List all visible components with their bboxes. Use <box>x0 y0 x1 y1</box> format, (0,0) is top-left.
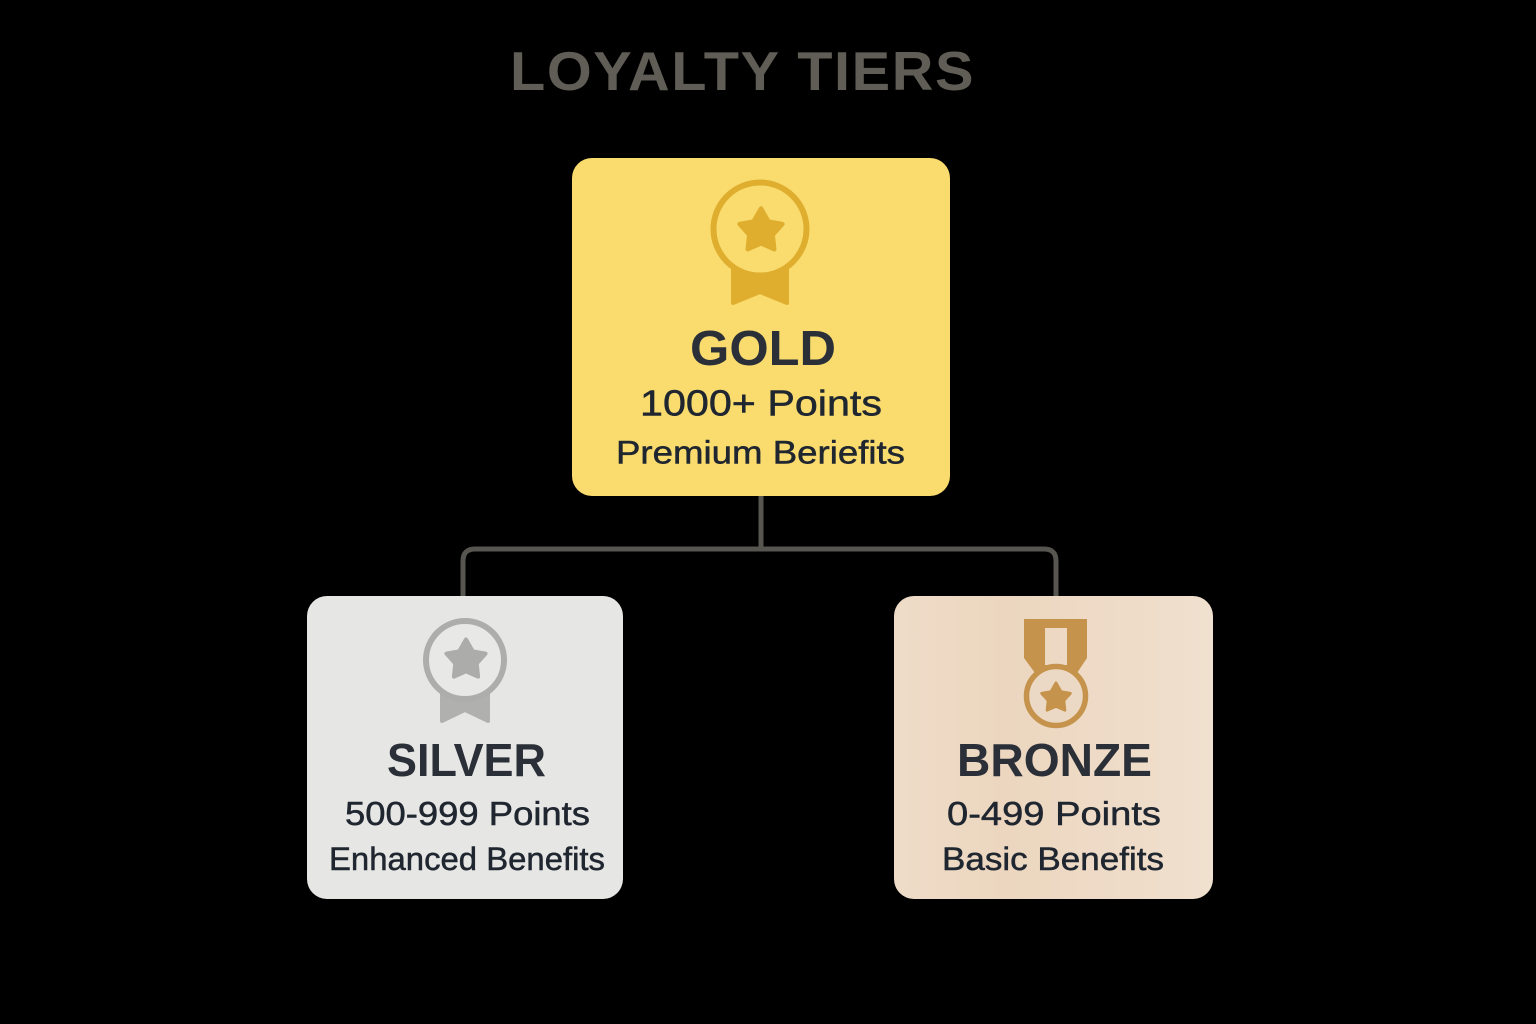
title: LOYALTY TIERS <box>510 40 975 102</box>
icon: bronze medal <box>1024 619 1087 726</box>
panel: silver tier <box>307 596 623 899</box>
connector lines between tiers <box>463 496 1056 596</box>
text: gold points: 1000+ Points <box>640 382 882 424</box>
icon: silver medal <box>426 621 504 721</box>
panel: gold tier <box>572 158 950 496</box>
text: bronze benefits: Basic Benefits <box>942 841 1164 877</box>
icon: gold medal <box>714 182 806 303</box>
text: silver points: 500-999 Points <box>345 795 590 832</box>
text: bronze points: 0-499 Points <box>947 795 1161 832</box>
panel: bronze tier <box>894 596 1213 899</box>
heading: gold: GOLD <box>690 322 836 376</box>
text: silver benefits: Enhanced Benefits <box>329 841 605 877</box>
heading: bronze: BRONZE <box>957 734 1152 786</box>
heading: silver: SILVER <box>387 734 546 786</box>
text: gold benefits: Premium Beriefits <box>616 434 905 470</box>
